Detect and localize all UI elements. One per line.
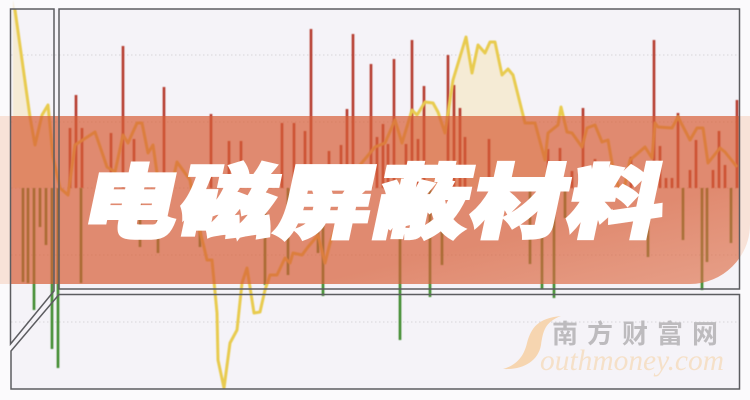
watermark Chinese site name: 南方财富网 bbox=[552, 319, 727, 349]
banner pale outer edges bbox=[0, 116, 750, 284]
title: 电 bbox=[75, 159, 189, 248]
title: 磁 bbox=[172, 159, 286, 248]
watermark site url: outhmoney.com bbox=[540, 345, 724, 377]
title: 蔽 bbox=[366, 159, 480, 248]
falling volume bars bbox=[23, 188, 731, 368]
title bbox=[75, 159, 674, 248]
title: 料 bbox=[560, 159, 674, 248]
area under yellow line bbox=[13, 0, 549, 188]
dotted grid lines bbox=[11, 55, 739, 322]
watermark swoosh logo bbox=[503, 316, 561, 369]
banner main layer bbox=[11, 116, 740, 284]
rising volume bars bbox=[70, 29, 737, 188]
title: 材 bbox=[463, 159, 577, 248]
title: 屏 bbox=[269, 159, 383, 248]
